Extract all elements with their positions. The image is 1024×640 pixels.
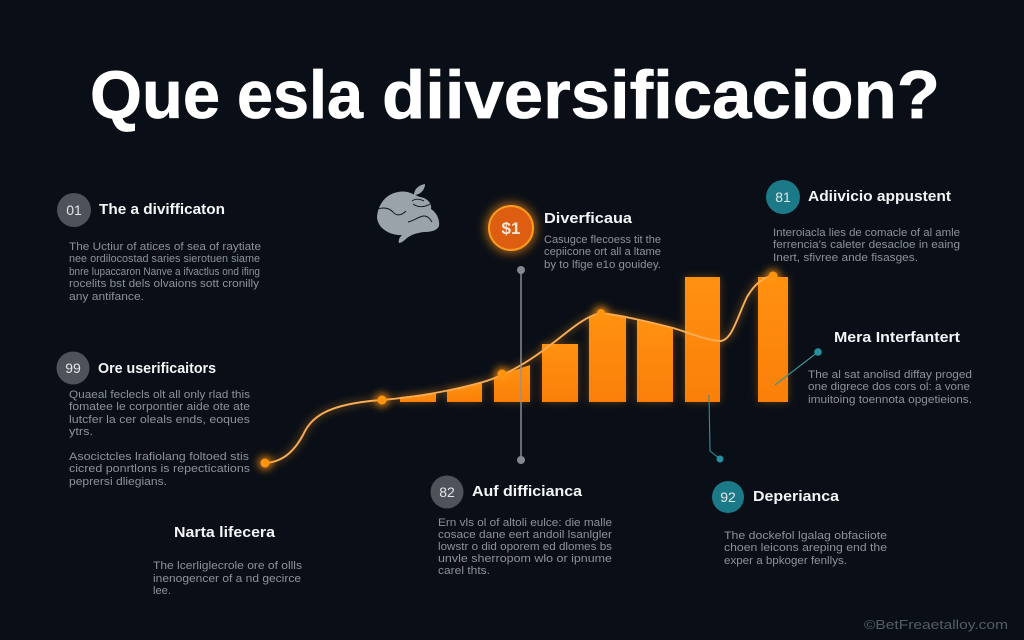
heading: Adiivicio appustent	[808, 189, 951, 205]
body text: The dockefol lgalag obfaciiote	[724, 530, 887, 542]
body text: Asocictcles lrafiolang foltoed stis	[69, 451, 250, 463]
connector: teal line to mera interfantert	[775, 348, 822, 385]
panel: diverficaua	[486, 203, 661, 271]
body text: ytrs.	[69, 426, 93, 438]
watermark: ©BetFreaetalloy.com	[864, 617, 1008, 632]
title	[90, 57, 940, 133]
body text: ferrencia's caleter desacloe in eaing	[773, 239, 960, 251]
body text: nee ordilocostad saries sierotuen siame	[69, 253, 260, 265]
body text	[438, 517, 613, 577]
body text: Ern vls ol of altoli eulce: die malle	[438, 517, 612, 529]
panel: auf difficianca	[430, 476, 613, 577]
body text: cepiicone ort all a ltame	[544, 246, 661, 258]
body text: Quaeal feclecls olt all only rlad this	[69, 389, 251, 401]
body text: lutcfer la cer oleals ends, eoques	[69, 414, 251, 426]
body text	[153, 560, 303, 597]
heading: Deperianca	[753, 489, 840, 505]
number badge 99	[56, 352, 90, 384]
panel: narta lifecera	[153, 525, 303, 597]
heading: Narta lifecera	[174, 525, 276, 541]
number badge 81: 81	[775, 189, 791, 205]
number badge 92	[712, 481, 744, 513]
number badge 01: 01	[66, 202, 82, 218]
heading: The a divifficaton	[99, 202, 225, 218]
body text: one digrece dos cors ol: a vone	[808, 381, 970, 393]
icon: brain apple	[377, 184, 439, 243]
heading: Mera Interfantert	[834, 330, 960, 346]
body text: peprersi dliegians.	[69, 476, 167, 488]
data points	[258, 269, 780, 470]
number badge $1	[486, 203, 536, 253]
connector: teal line to deperianca	[709, 395, 724, 462]
bars	[400, 277, 788, 402]
body text: Interoiacla lies de comacle of al amle	[773, 227, 960, 239]
heading: Ore userificaitors	[98, 361, 216, 377]
panel: adiivicio appustent	[766, 180, 960, 264]
title: Que	[90, 57, 220, 133]
number badge 82	[430, 476, 464, 508]
body text: The lcerliglecrole ore of ollls	[153, 560, 303, 572]
body text: fomatee le corpontier aide ote ate	[69, 401, 250, 413]
body text	[69, 389, 251, 488]
body text: imuitoing toennota opgetieions.	[808, 394, 972, 406]
body text: choen leicons areping end the	[724, 542, 887, 554]
body text: unvle sherropom wlo or ipnume	[438, 553, 612, 565]
heading: Auf difficianca	[472, 484, 583, 500]
title: diiversificacion?	[382, 57, 940, 133]
body text: carel thts.	[438, 565, 490, 577]
connector: gray vertical line	[517, 266, 525, 464]
body text	[808, 369, 972, 406]
number badge $1: $1	[502, 219, 520, 238]
body text: bnre lupaccaron Nanve a ifvactlus ond ifing	[69, 266, 260, 278]
number badge 01	[57, 193, 91, 227]
body text: Casugce flecoess tit the	[544, 234, 661, 246]
trend line	[265, 276, 773, 463]
body text: any antifance.	[69, 291, 144, 303]
heading: Diverficaua	[544, 211, 633, 227]
panel: the a divifficaton	[57, 193, 261, 303]
body text: The al sat anolisd diffay proged	[808, 369, 972, 381]
body text: by to lfige e1o gouidey.	[544, 259, 661, 271]
body text	[69, 241, 261, 303]
bars glow	[400, 277, 788, 402]
body text	[544, 234, 661, 271]
chart: orange bars with trend line	[258, 269, 788, 470]
body text: cicred ponrtlons is repectications	[69, 463, 251, 475]
body text: inenogencer of a nd gecirce	[153, 573, 301, 585]
panel: ore userificaitors	[56, 352, 251, 488]
body text: exper a bpkoger fenllys.	[724, 555, 847, 567]
body text: lee.	[153, 585, 171, 597]
body text: cosace dane eert andoil lsanlgler	[438, 529, 612, 541]
panel: mera interfantert	[808, 330, 972, 406]
body text	[724, 530, 887, 567]
panel: deperianca	[712, 481, 887, 567]
number badge 92: 92	[720, 489, 736, 505]
body text: rocelits bst dels olvaions sott cronilly	[69, 278, 260, 290]
body text: Inert, sfivree ande fisasges.	[773, 252, 918, 264]
body text: lowstr o did oporem ed dlomes bs	[438, 541, 613, 553]
body text	[773, 227, 960, 264]
title: esla	[237, 57, 364, 133]
number badge 82: 82	[439, 484, 455, 500]
number badge 81	[766, 180, 800, 214]
body text: The Uctiur of atices of sea of raytiate	[69, 241, 261, 253]
number badge 99: 99	[65, 360, 81, 376]
